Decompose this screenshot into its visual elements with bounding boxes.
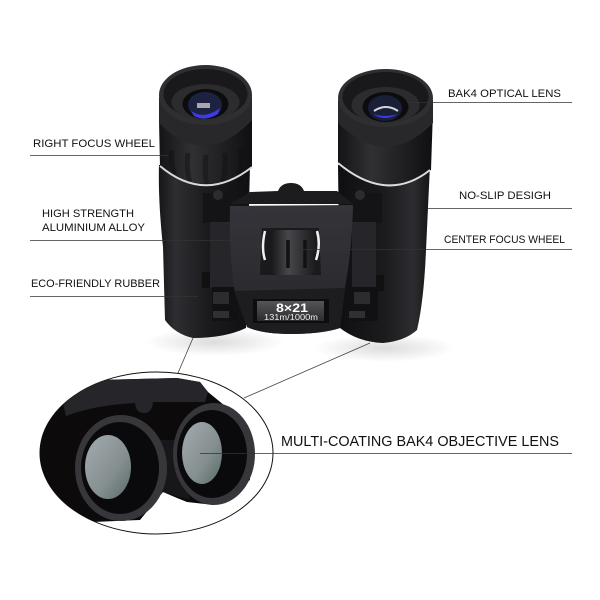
callout: right focus wheel: RIGHT FOCUS WHEEL [33,138,155,150]
right eyecup barrel [338,110,433,185]
right eyepiece lens [368,95,402,121]
right objective [173,403,255,505]
magnification plate [253,299,329,323]
left focus wheel [159,120,252,184]
callout: no-slip design: NO-SLIP DESIGH [459,190,551,202]
left silver ring [160,166,252,185]
right eyecup rim [338,69,433,127]
bridge hump [230,183,353,204]
lower body fill between lenses [160,440,190,500]
detail oval: objective lenses [30,372,273,534]
left objective [75,415,167,521]
callout: high strength aluminium alloy: ALUMINIUM ALLOY [42,222,146,234]
right barrel body [338,165,430,343]
infographic canvas [30,65,572,534]
bridge plate [230,205,353,334]
center focus window [260,228,321,275]
window highlights [263,231,319,260]
left hinge [202,190,238,321]
left eyepiece lens [188,92,222,119]
left barrel body [159,165,250,338]
callout: high strength aluminium alloy [30,208,238,240]
right eyecup collar [338,100,433,146]
callout: multi-coating objective lens: MULTI-COATING BAK4 OBJECTIVE LENS [281,434,559,450]
callout: eco-friendly rubber: ECO-FRIENDLY RUBBER [31,278,160,290]
magnification plate: 8×21 [276,301,308,315]
callout: bak4 optical lens: BAK4 OPTICAL LENS [448,88,561,100]
zoom connector lines [178,338,370,398]
callout: center focus wheel: CENTER FOCUS WHEEL [444,234,565,246]
plate lower section [234,288,345,334]
callout: right focus wheel [30,138,168,156]
magnification plate: 131m/1000m [264,313,318,322]
right silver ring [338,163,430,185]
bridge top [63,378,208,416]
callout: high strength aluminium alloy: HIGH STRENGTH [42,208,134,220]
right hinge [346,190,384,321]
left eyecup [159,97,252,146]
binoculars ground shadow [145,328,455,362]
dark binocular body [30,378,250,530]
left wheel grip ridges [171,148,242,186]
binoculars: top view [159,65,433,343]
center focus wheel [271,230,315,275]
